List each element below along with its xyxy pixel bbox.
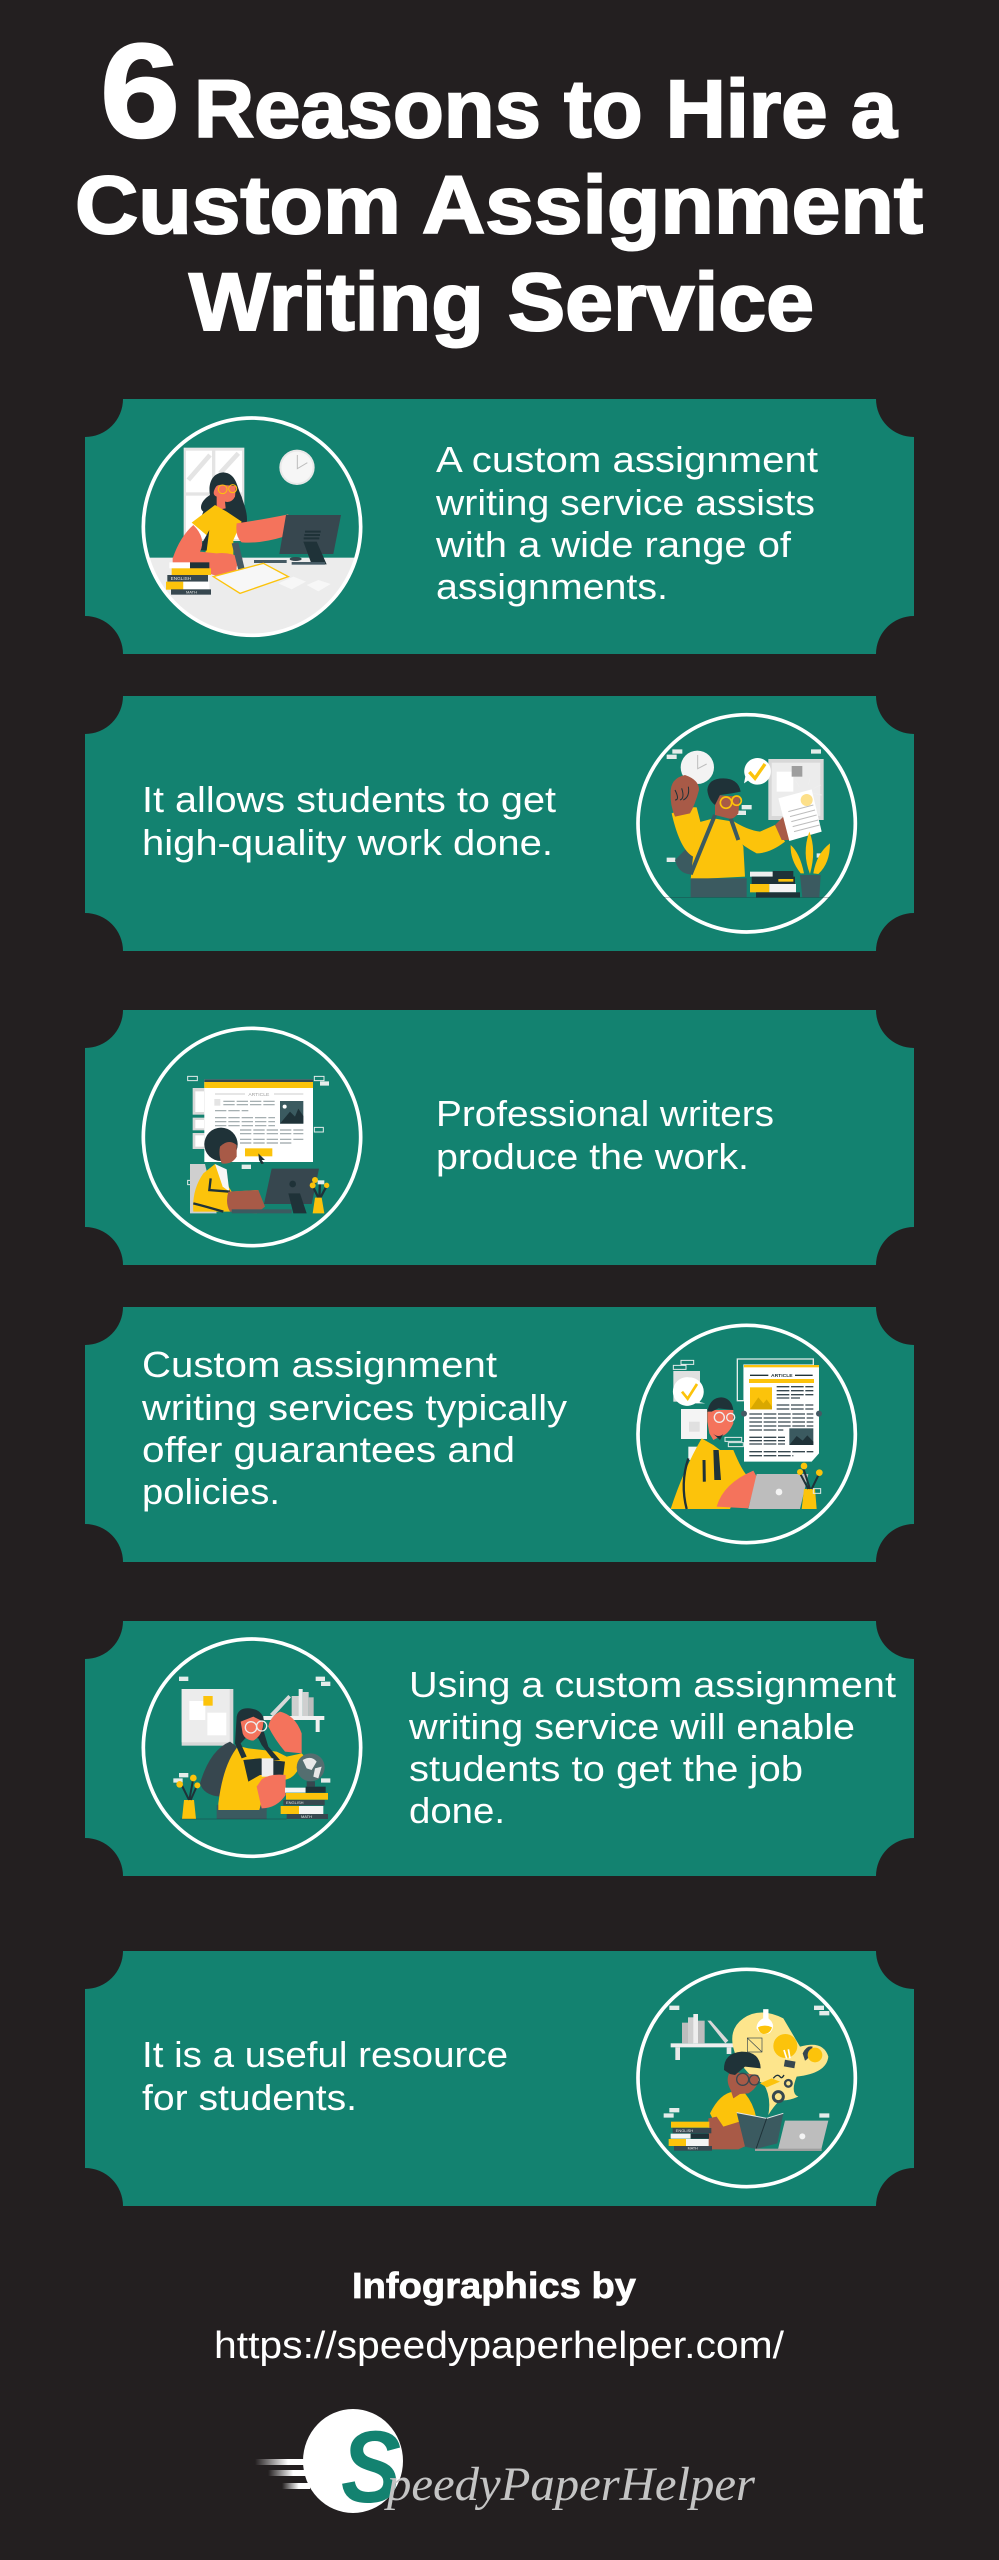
logo: SpeedyPaperHelper — [255, 2409, 755, 2524]
text: reason 3 — [436, 1093, 774, 1177]
panel: reason 4 — [85, 1307, 914, 1562]
icon: student reading with ideas rising from book — [638, 1969, 855, 2187]
panel: reason 5 — [85, 1621, 914, 1876]
text: reason 5: writing service will enable — [408, 1706, 855, 1747]
icon: student adjusting glasses with books and globe: ENGLISH — [286, 1800, 304, 1805]
text: reason 4: writing services typically — [141, 1387, 567, 1428]
panel: reason 2 — [85, 696, 914, 951]
icon: woman working at desktop computer — [143, 418, 361, 638]
text: reason 2 — [142, 779, 556, 863]
icon: student reading with ideas rising from book: ENGLISH — [676, 2128, 693, 2133]
text: reason 1: A custom assignment — [436, 439, 818, 480]
text: reason 1: with a wide range of — [435, 524, 792, 565]
logo wordmark: peedyPaperHelper — [384, 2458, 755, 2511]
logo letter S: S — [341, 2410, 401, 2524]
text: reason 6 — [142, 2034, 508, 2118]
icon: writer publishing an article on screen — [143, 1028, 361, 1246]
icon: woman working at desktop computer: MATH — [186, 589, 197, 594]
text: reason 2: high-quality work done. — [142, 822, 553, 863]
title: Reasons to Hire a — [194, 64, 898, 155]
text: reason 1: assignments. — [436, 566, 668, 607]
panel: reason 6 — [85, 1951, 914, 2206]
text: reason 5 — [408, 1664, 896, 1831]
panel: reason 1 — [85, 399, 914, 654]
icon: man at laptop with article — [638, 1325, 855, 1543]
text: reason 1: writing service assists — [435, 482, 815, 523]
text: reason 1 — [435, 439, 818, 607]
title — [75, 17, 923, 348]
title: Custom Assignment — [75, 160, 923, 251]
icon: student adjusting glasses with books and globe: MATH — [301, 1814, 312, 1819]
text: reason 5: Using a custom assignment — [409, 1664, 896, 1705]
icon: man at laptop with article: ARTICLE — [771, 1373, 793, 1379]
icon: student adjusting glasses with books and globe — [143, 1639, 361, 1856]
icon: speed lines — [255, 2459, 310, 2489]
icon: woman working at desktop computer: ENGLISH — [171, 576, 191, 581]
icon: writer publishing an article on screen: ARTICLE — [248, 1092, 270, 1098]
credit heading: Infographics by — [352, 2265, 636, 2306]
title: Writing Service — [189, 257, 814, 348]
text: reason 4: offer guarantees and — [142, 1429, 515, 1470]
text: reason 4: policies. — [142, 1471, 280, 1512]
panel: reason 3 — [85, 1010, 914, 1265]
text: reason 5: done. — [409, 1790, 505, 1831]
icon: student reading with ideas rising from book: MATH — [688, 2147, 698, 2151]
text: reason 2: It allows students to get — [142, 779, 556, 820]
title: 6 — [100, 17, 180, 166]
text: reason 6: It is a useful resource — [142, 2034, 508, 2075]
icon: student holding graded paper — [638, 715, 855, 932]
text: reason 5: students to get the job — [409, 1748, 803, 1789]
text: reason 4 — [141, 1344, 567, 1512]
text: reason 3: produce the work. — [436, 1136, 749, 1177]
icon: white oval — [303, 2409, 403, 2513]
text: reason 4: Custom assignment — [142, 1344, 497, 1385]
credit url: https://speedypaperhelper.com/ — [214, 2325, 784, 2367]
text: reason 3: Professional writers — [436, 1093, 774, 1134]
text: reason 6: for students. — [142, 2077, 357, 2118]
